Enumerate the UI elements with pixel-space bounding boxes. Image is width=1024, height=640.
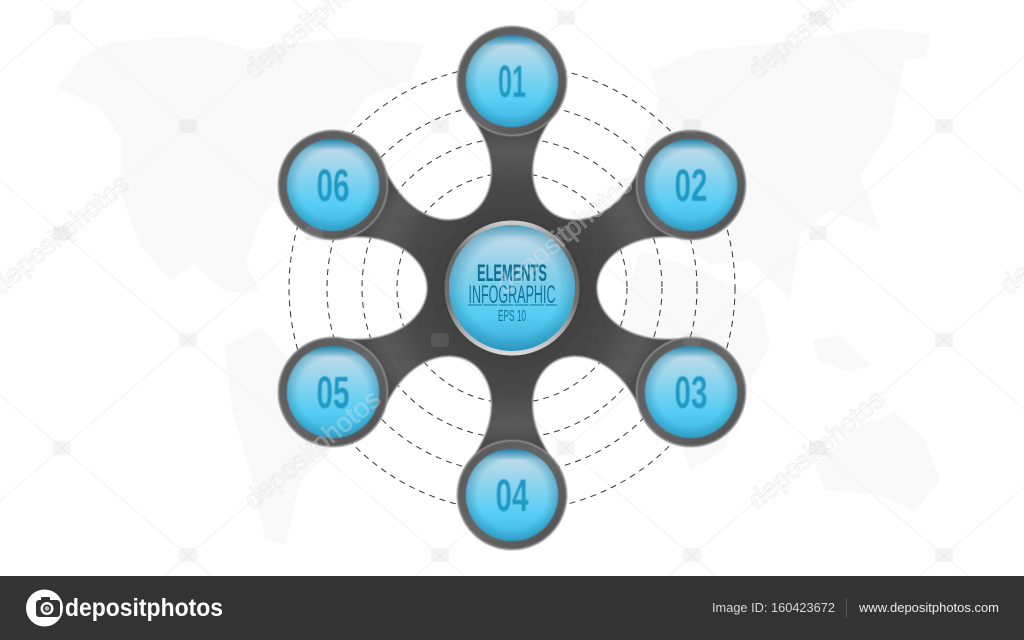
node 05 [278, 338, 388, 446]
node 04: 04 [496, 470, 528, 521]
node 01: 01 [498, 56, 526, 107]
dark six-armed connector shape [346, 119, 678, 457]
map: eurasia [640, 28, 932, 300]
map: australia [815, 412, 940, 512]
map: africa [620, 250, 770, 470]
background world map [58, 28, 940, 545]
node 06: 06 [316, 160, 350, 211]
watermark logos: depositphotos [490, 169, 638, 300]
watermark logos: depositphotos [238, 384, 386, 515]
hub version label: EPS 10 [498, 308, 526, 325]
icon: depositphotos camera logo [26, 590, 63, 626]
map: north america [58, 36, 425, 292]
watermark logos: depositphotos [742, 384, 890, 515]
node 05: 05 [316, 367, 350, 418]
node 01 [458, 26, 566, 136]
central hub [444, 220, 580, 356]
node 03: 03 [674, 367, 708, 418]
website url: www.depositphotos.com [858, 600, 999, 615]
dashed concentric circles [289, 65, 735, 511]
image id: Image ID: 160423672 [712, 600, 835, 615]
node 02: 02 [674, 160, 708, 211]
node 06 [278, 130, 388, 240]
map: south east islands [812, 335, 870, 372]
watermark camera icons [53, 11, 953, 562]
node 02 [636, 130, 746, 240]
footer bar [0, 576, 1024, 640]
node 03 [636, 338, 746, 446]
brand name: depositphotos [65, 594, 223, 622]
node 04 [458, 440, 566, 550]
map: south america [225, 328, 348, 545]
hub subheading: INFOGRAPHIC [468, 281, 556, 309]
hub heading: ELEMENTS [477, 260, 547, 287]
